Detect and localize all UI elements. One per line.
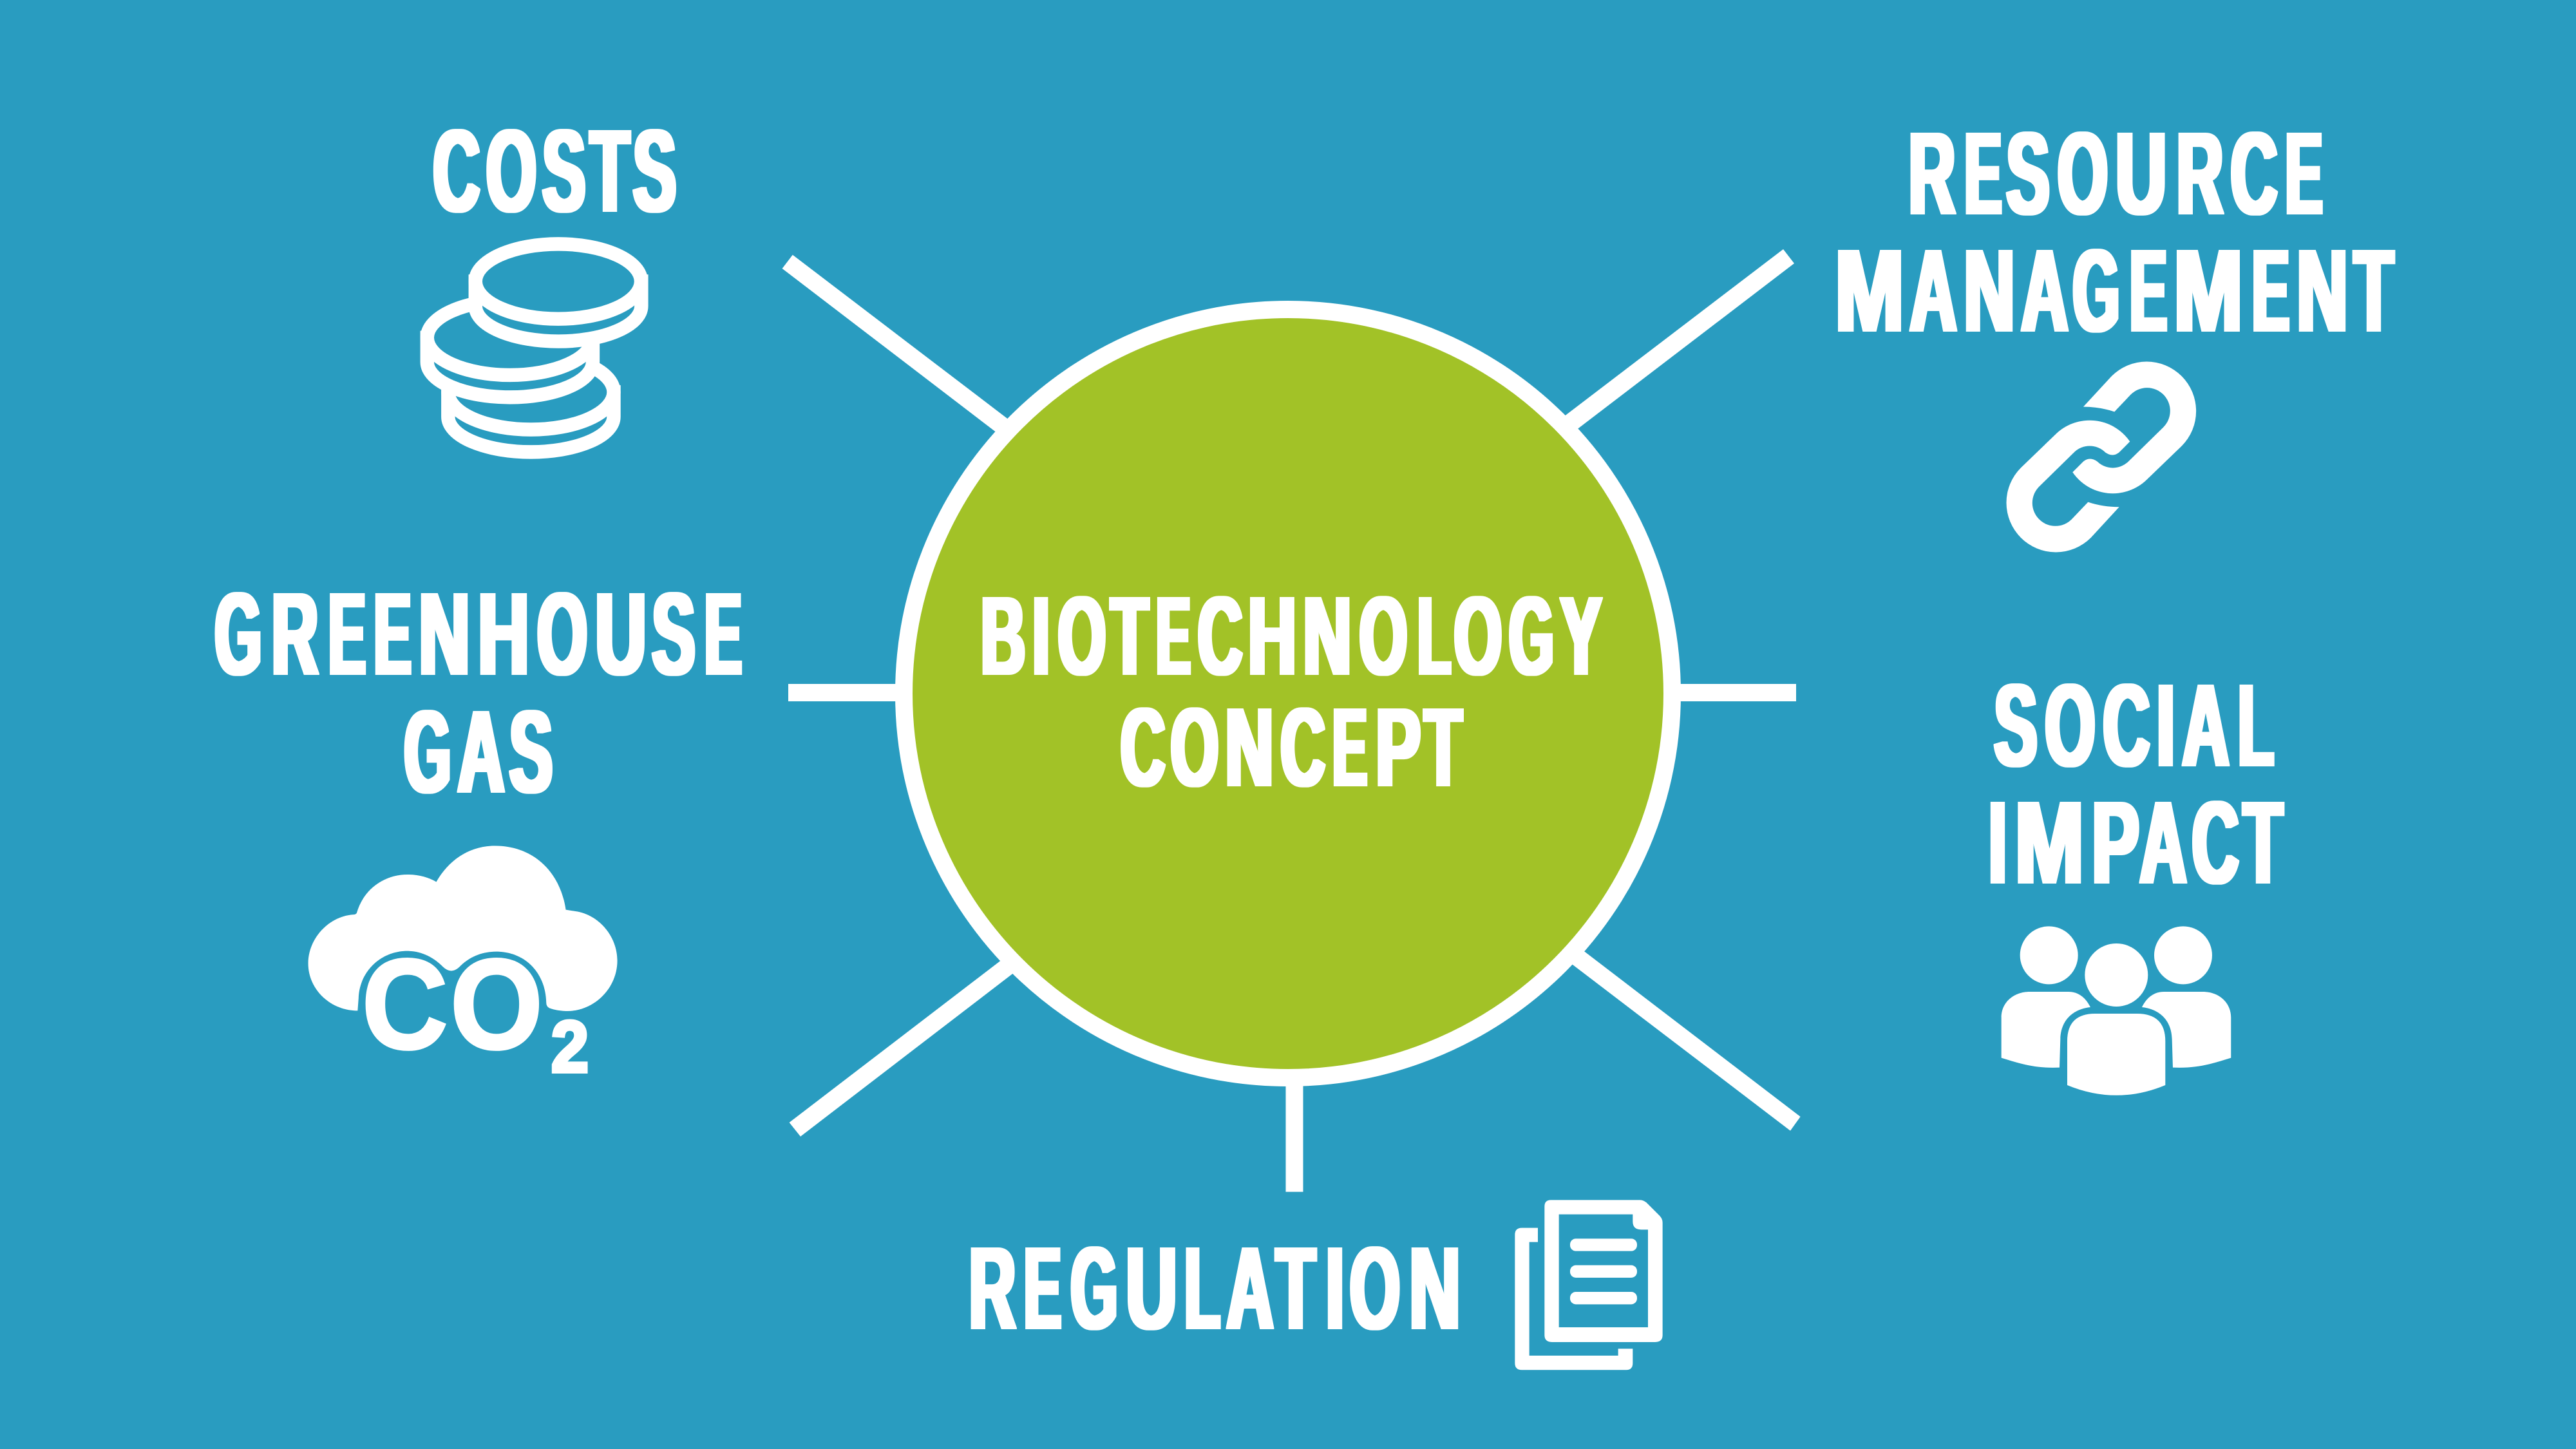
heading: resource management: T bbox=[2354, 225, 2394, 357]
title: biotechnology concept: Y bbox=[1560, 574, 1602, 698]
heading: greenhouse gas: O bbox=[537, 569, 587, 700]
heading: greenhouse gas: E bbox=[705, 569, 742, 700]
heading: regulation: U bbox=[1126, 1223, 1177, 1354]
heading: greenhouse gas: AS bbox=[458, 687, 553, 818]
icon: coins bbox=[427, 244, 641, 452]
document: front bbox=[1544, 1200, 1663, 1342]
panel: regulation bbox=[969, 1200, 1663, 1370]
heading: greenhouse gas: H bbox=[478, 569, 529, 700]
heading: costs: COSTS bbox=[433, 106, 676, 237]
heading: resource management: N bbox=[1964, 225, 2015, 357]
heading: regulation: ATIO bbox=[1227, 1223, 1400, 1354]
document text lines bbox=[1570, 1238, 1637, 1304]
heading: greenhouse gas: G bbox=[404, 687, 451, 818]
title: biotechnology concept: H bbox=[1248, 574, 1296, 698]
heading: regulation bbox=[969, 1223, 1461, 1354]
heading: resource management: M bbox=[2174, 225, 2243, 357]
spoke: top right bbox=[1555, 249, 1794, 437]
title: biotechnology concept: N bbox=[1226, 685, 1273, 810]
spoke: top left bbox=[782, 255, 1018, 439]
title: biotechnology concept bbox=[981, 574, 1602, 810]
spoke: left bbox=[788, 684, 911, 701]
heading: resource management: RC bbox=[2177, 108, 2277, 240]
title: biotechnology concept: T bbox=[1425, 685, 1462, 810]
heading: social impact: P bbox=[2092, 777, 2139, 909]
heading: resource management: U bbox=[2116, 108, 2166, 240]
panel: social impact bbox=[1989, 660, 2283, 1095]
title: biotechnology concept: E bbox=[1333, 685, 1367, 810]
icon: documents bbox=[1515, 1200, 1663, 1370]
co2 label: CO bbox=[362, 933, 543, 1075]
heading: greenhouse gas: N bbox=[419, 569, 470, 700]
heading: greenhouse gas: S bbox=[652, 569, 695, 700]
title: biotechnology concept: O bbox=[1359, 574, 1407, 698]
heading: social impact: L bbox=[2239, 660, 2274, 791]
heading: greenhouse gas: G bbox=[215, 569, 261, 700]
heading: social impact: ACT bbox=[2140, 777, 2283, 909]
heading: social impact: M bbox=[2015, 777, 2084, 909]
heading: resource management: E bbox=[2130, 225, 2167, 357]
spoke: right bbox=[1668, 684, 1796, 701]
heading: regulation: E bbox=[1024, 1223, 1061, 1354]
panel: greenhouse gas bbox=[215, 569, 742, 1087]
central circle bbox=[904, 309, 1672, 1078]
person: right bbox=[2142, 926, 2231, 1068]
heading: resource management: SO bbox=[2007, 108, 2108, 240]
link: upper right bbox=[2072, 362, 2196, 493]
heading: greenhouse gas: R bbox=[272, 569, 318, 700]
cloud shape bbox=[308, 846, 618, 1011]
title: biotechnology concept: L bbox=[1417, 574, 1451, 698]
title: biotechnology concept: C bbox=[1281, 685, 1325, 810]
title: biotechnology concept: O bbox=[1454, 574, 1502, 698]
title: biotechnology concept: N bbox=[1303, 574, 1351, 698]
heading: regulation: L bbox=[1184, 1223, 1220, 1354]
icon: people bbox=[2002, 926, 2231, 1095]
title: biotechnology concept: P bbox=[1376, 685, 1421, 810]
icon: chain link bbox=[2007, 362, 2196, 552]
heading: resource management: E bbox=[2252, 225, 2289, 357]
document: back bbox=[1515, 1228, 1633, 1370]
heading: greenhouse gas: U bbox=[595, 569, 647, 700]
heading: resource management: E bbox=[1965, 108, 2002, 240]
heading: greenhouse gas: E bbox=[374, 569, 411, 700]
heading: resource management: N bbox=[2297, 225, 2348, 357]
person: centre bbox=[2067, 943, 2165, 1095]
heading: resource management: R bbox=[1909, 108, 1955, 240]
heading: resource management: A bbox=[1910, 225, 1956, 357]
heading: resource management: A bbox=[2022, 225, 2068, 357]
heading: regulation: G bbox=[1071, 1223, 1117, 1354]
panel: resource management bbox=[1835, 108, 2394, 552]
title: biotechnology concept: E bbox=[1157, 574, 1190, 698]
heading: resource management: M bbox=[1835, 225, 1904, 357]
heading: social impact: I bbox=[1989, 777, 2007, 909]
heading: resource management: G bbox=[2073, 225, 2119, 357]
connector spokes bbox=[782, 249, 1801, 1192]
heading: resource management bbox=[1835, 108, 2394, 357]
spoke: bottom bbox=[1285, 1075, 1303, 1192]
heading: social impact: SOCIA bbox=[1994, 660, 2229, 791]
title: biotechnology concept: G bbox=[1509, 574, 1554, 698]
heading: regulation: N bbox=[1409, 1223, 1461, 1354]
heading: resource management: E bbox=[2286, 108, 2322, 240]
spoke: bottom right bbox=[1562, 943, 1801, 1131]
title: biotechnology concept: C bbox=[1198, 574, 1242, 698]
coin: top bbox=[475, 244, 641, 341]
heading: regulation: R bbox=[969, 1223, 1016, 1354]
title: biotechnology concept: BIOT bbox=[981, 574, 1148, 698]
coin: bottom bbox=[448, 355, 614, 452]
coin: middle bbox=[427, 300, 592, 397]
person: left bbox=[2002, 926, 2090, 1068]
heading: greenhouse gas: E bbox=[328, 569, 366, 700]
co2 label: 2 bbox=[551, 1007, 589, 1087]
heading: social impact bbox=[1989, 660, 2283, 909]
heading: greenhouse gas bbox=[215, 569, 742, 818]
title: biotechnology concept: CO bbox=[1121, 685, 1218, 810]
link: lower left bbox=[2007, 421, 2130, 552]
panel: costs bbox=[427, 106, 676, 452]
icon: co2 cloud bbox=[308, 846, 618, 1087]
spoke: bottom left bbox=[790, 953, 1023, 1137]
